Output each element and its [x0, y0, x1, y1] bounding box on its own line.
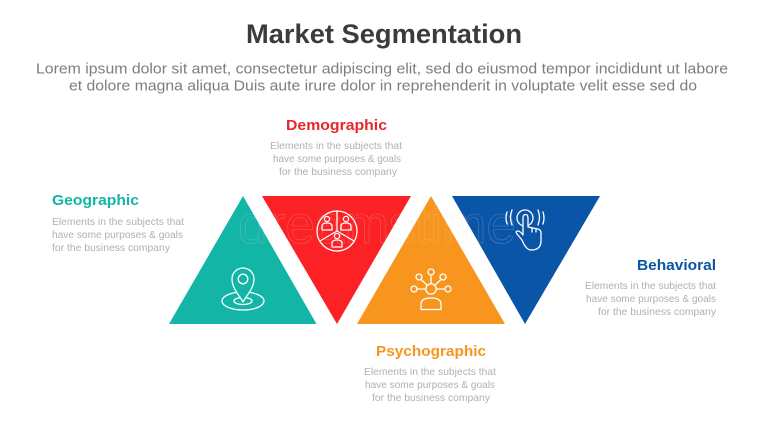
subtitle paragraph	[36, 60, 728, 94]
icon: connected person	[411, 269, 451, 310]
text block: psychographic	[364, 343, 496, 404]
text block: behavioral: Elements in the subjects that	[585, 280, 716, 292]
watermark: dreamstime	[238, 195, 516, 255]
text block: geographic: Elements in the subjects that	[52, 216, 184, 228]
text block: geographic: for the business company	[52, 242, 171, 254]
subtitle paragraph: et dolore magna aliqua Duis aute irure dolor in reprehenderit in voluptate velit esse sed do	[69, 78, 697, 94]
triangle: geographic	[169, 196, 316, 324]
text block: behavioral	[585, 257, 717, 318]
text block: geographic: Geographic	[52, 192, 139, 209]
triangle: demographic	[262, 196, 411, 324]
triangle: behavioral	[452, 196, 600, 324]
text block: demographic: for the business company	[279, 166, 398, 178]
text block: psychographic: Psychographic	[376, 343, 486, 360]
subtitle paragraph: Lorem ipsum dolor sit amet, consectetur adipiscing elit, sed do eiusmod tempor incididunt ut labore	[36, 60, 728, 78]
text block: demographic: have some purposes & goals	[273, 153, 401, 165]
icon: people in circle	[317, 211, 357, 251]
text block: behavioral: Behavioral	[637, 257, 716, 274]
icon: tapping hand	[506, 210, 544, 250]
text block: demographic: Elements in the subjects that	[270, 140, 402, 152]
title: Market Segmentation	[246, 19, 522, 49]
text block: geographic	[52, 192, 184, 254]
icon: location pin	[222, 268, 264, 310]
text block: demographic	[270, 117, 402, 178]
text block: behavioral: have some purposes & goals	[586, 293, 716, 305]
text block: psychographic: have some purposes & goals	[365, 379, 495, 391]
text block: behavioral: for the business company	[598, 306, 717, 318]
triangle: psychographic	[357, 196, 505, 324]
text block: geographic: have some purposes & goals	[52, 229, 183, 241]
text block: psychographic: for the business company	[372, 392, 491, 404]
text block: demographic: Demographic	[286, 117, 387, 134]
text block: psychographic: Elements in the subjects that	[364, 366, 496, 378]
